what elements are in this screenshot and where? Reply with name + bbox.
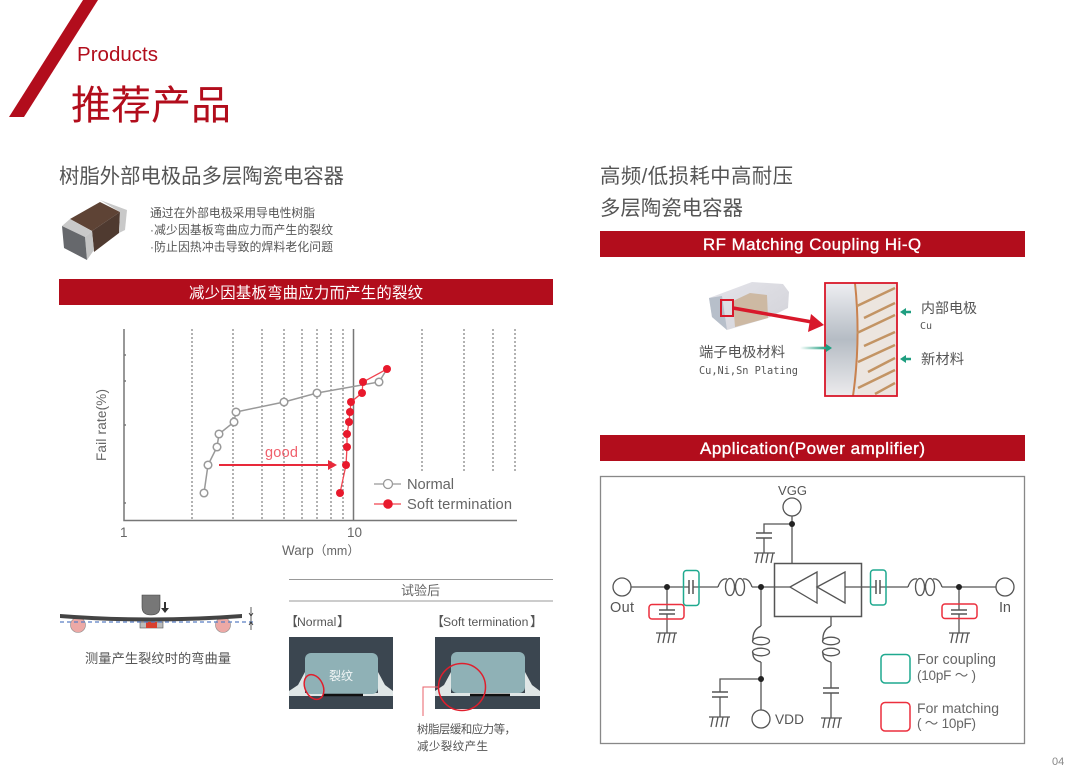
heading: right section: 多层陶瓷电容器	[600, 197, 743, 220]
circuit labels: In	[999, 600, 1011, 616]
icon: ceramic capacitor chip	[62, 200, 127, 260]
legend: for coupling	[881, 652, 996, 683]
wiring	[631, 516, 996, 728]
label: normal: 【	[285, 614, 298, 629]
diagram: bending measurement	[60, 595, 254, 632]
axis labels: Fail rate(%)	[94, 389, 109, 461]
legend: for coupling: (10pF ～ )	[917, 668, 976, 683]
banner: Application	[600, 435, 1025, 461]
text block: product description: 通过在外部电极采用导电性树脂	[150, 206, 315, 220]
callout: resin layer relieves stress: 减少裂纹产生	[417, 739, 488, 753]
inductors	[718, 579, 752, 587]
legend: for matching: ( ～ 10pF)	[917, 716, 976, 731]
series: soft termination	[336, 365, 391, 497]
labels: 端子电极材料	[699, 344, 785, 361]
circuit labels	[610, 483, 1011, 727]
heading: after test	[289, 580, 553, 601]
diagram: capacitor structure	[699, 282, 977, 396]
label: soft termination: Soft termination	[443, 615, 528, 629]
banner: RF Matching Coupling Hi-Q: RF Matching Coupling Hi-Q	[703, 235, 921, 254]
legend: for matching	[881, 700, 999, 731]
arrows: green pointers	[800, 308, 911, 363]
callout: resin layer relieves stress	[417, 687, 516, 753]
callout: resin layer relieves stress: 树脂层缓和应力等，	[417, 722, 516, 736]
labels: Cu,Ni,Sn Plating	[699, 365, 798, 377]
legend: for coupling: For coupling	[917, 652, 996, 668]
decorative red slash	[9, 0, 98, 117]
label: normal: Normal	[297, 615, 336, 629]
matching highlights	[649, 604, 977, 619]
circuit labels: VGG	[778, 483, 807, 498]
heading: left section: 树脂外部电极品多层陶瓷电容器	[59, 165, 344, 188]
subtitle: Products: Products	[77, 43, 158, 66]
heading: right section: 高频/低损耗中高耐压	[600, 165, 793, 188]
capacitors	[689, 580, 880, 594]
banner: RF Matching Coupling Hi-Q	[600, 231, 1025, 257]
series: normal	[200, 369, 387, 497]
axis labels: （mm）	[314, 544, 360, 558]
label: soft termination: 【	[431, 614, 444, 629]
text block: product description: ·防止因热冲击导致的焊料老化问题	[150, 240, 333, 254]
label: soft termination: 】	[530, 614, 543, 629]
photo: normal cross-section	[289, 637, 393, 709]
terminals	[613, 498, 1014, 728]
amplifier block	[774, 564, 862, 616]
heading: right section	[600, 165, 793, 220]
heading: after test: 试验后	[401, 583, 440, 598]
coupling highlights	[684, 570, 886, 606]
text block: product description: ·减少因基板弯曲应力而产生的裂纹	[150, 223, 333, 237]
axis labels	[94, 389, 362, 558]
labels: 内部电极	[921, 300, 977, 316]
chip cutaway	[709, 282, 789, 330]
labels	[699, 300, 977, 377]
banner: Application: Application(Power amplifier)	[700, 439, 925, 458]
axis labels: 10	[347, 525, 362, 540]
circuit diagram: power amplifier	[600, 476, 1024, 744]
grid lines	[192, 329, 515, 520]
photo: soft termination cross-section	[435, 637, 540, 710]
text block: product description	[150, 206, 333, 254]
arrow: good: good	[265, 445, 298, 461]
title: 推荐产品	[71, 84, 231, 128]
legend	[374, 477, 512, 513]
axes	[124, 329, 517, 520]
circuit labels: Out	[610, 600, 634, 616]
photo: normal cross-section: 裂纹	[329, 669, 353, 683]
circuit labels: VDD	[775, 712, 804, 727]
grounds	[656, 633, 677, 643]
legend: for matching: For matching	[917, 700, 999, 716]
label: normal: 】	[337, 614, 350, 629]
legend: Soft termination	[407, 497, 512, 513]
junction nodes	[664, 521, 962, 682]
arrow: good	[219, 445, 337, 470]
axis labels: 1	[120, 525, 128, 540]
page number: 04	[1052, 756, 1064, 768]
labels: 新材料	[921, 351, 964, 368]
enlarged cross-section	[825, 283, 897, 396]
banner: crack reduction	[59, 279, 553, 305]
arrow: magnify	[733, 308, 824, 332]
axis labels: Warp	[282, 543, 314, 558]
caption: bending measurement: 测量产生裂纹时的弯曲量	[85, 650, 231, 666]
label: normal	[285, 614, 350, 629]
labels: Cu	[920, 321, 932, 332]
banner: crack reduction: 减少因基板弯曲应力而产生的裂纹	[189, 283, 424, 302]
legend: Normal	[407, 477, 454, 493]
chart: fail rate vs warp	[94, 329, 517, 558]
